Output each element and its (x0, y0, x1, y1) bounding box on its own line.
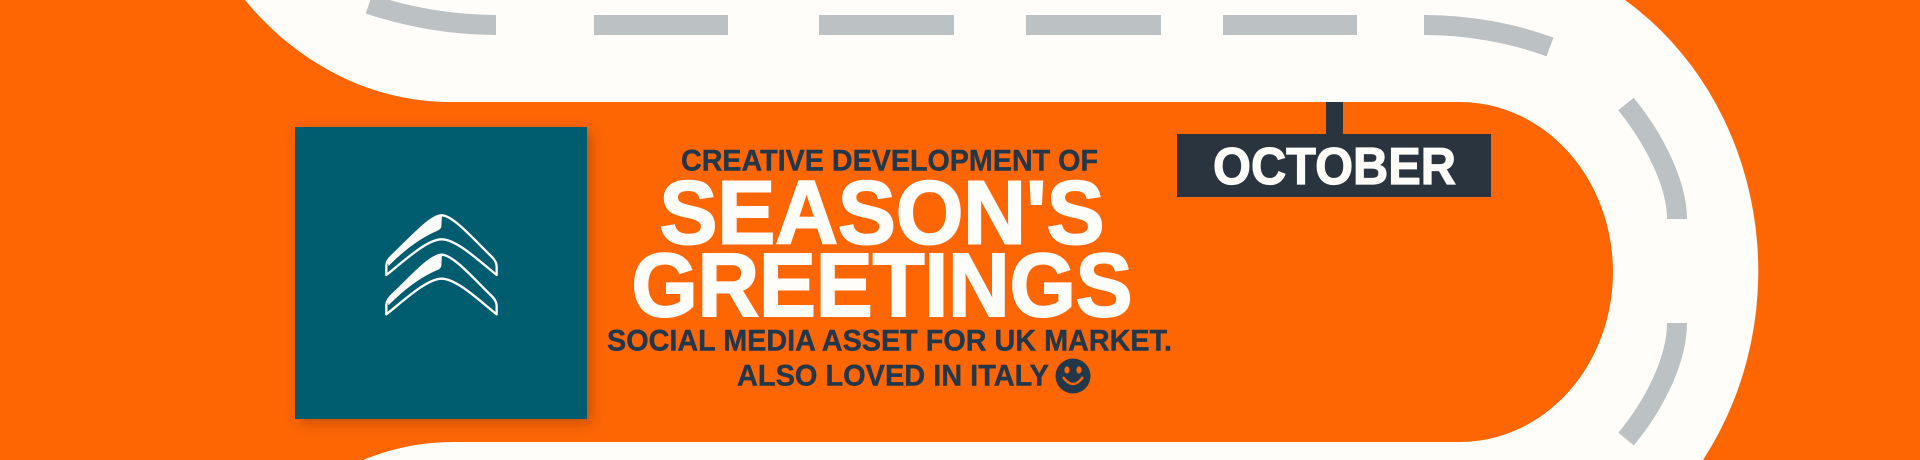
road dashes (369, 4, 1677, 439)
icon: double chevron logo (386, 215, 497, 314)
road (245, 0, 1758, 460)
text block: creative development of: CREATIVE DEVELOPMENT OF (681, 144, 1098, 178)
text block: social media asset: SOCIAL MEDIA ASSET FOR UK MARKET. (607, 324, 1172, 358)
label: october: OCTOBER (1213, 138, 1456, 196)
panel: logo square (295, 127, 587, 419)
icon: smiley (1056, 358, 1090, 394)
signpost: october (1177, 102, 1491, 197)
text block: also loved in italy: ALSO LOVED IN ITALY (737, 360, 1049, 392)
heading: season's: SEASON'S (660, 164, 1104, 264)
heading: greetings: GREETINGS (632, 236, 1132, 336)
